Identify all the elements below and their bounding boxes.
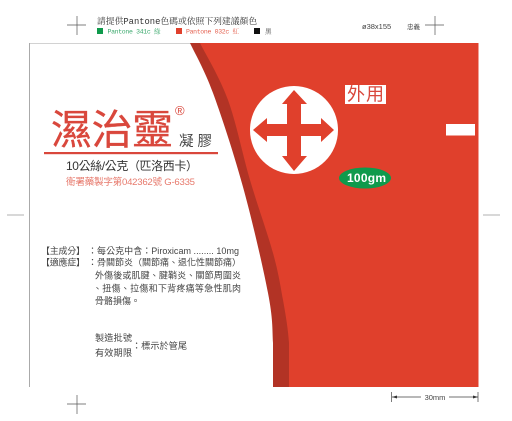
ingredient and indication text: 【適應症】 — [41, 256, 85, 268]
batch and expiry text: ：標示於管尾 — [132, 340, 187, 351]
red divider — [44, 152, 218, 154]
dosage form: 凝膠 — [179, 133, 212, 150]
colour legend: Pantone 341c 綠 — [108, 26, 161, 36]
colour legend — [97, 26, 272, 36]
ingredient and indication text: ：每公克中含：Piroxicam ........ 10mg — [88, 245, 239, 256]
approval label: 忠義 — [407, 22, 420, 31]
white tab — [446, 124, 475, 136]
ingredient and indication text: 外傷後或肌腱、腱鞘炎、關節周圍炎 — [95, 270, 241, 280]
ingredient and indication text: ：骨關節炎（關節痛、退化性關節痛） — [88, 256, 241, 268]
ingredient and indication text: 【主成分】 — [41, 245, 85, 256]
ingredient and indication text — [41, 245, 241, 306]
licence number: 衛署藥製字第042362號 G-6335 — [66, 176, 195, 188]
dark red curved band — [190, 43, 295, 387]
ingredient and indication text: 、扭傷、拉傷和下背疼痛等急性肌肉 — [93, 282, 241, 294]
tube size label: ø38x155 — [362, 22, 391, 31]
net weight badge — [339, 168, 391, 188]
dimension: 30mm: 30mm — [425, 393, 445, 402]
registered mark: ® — [175, 103, 185, 118]
icon: four-way arrows in circle — [250, 86, 338, 174]
red panel — [190, 43, 478, 387]
batch and expiry text — [95, 332, 187, 358]
net weight badge: 100gm — [347, 171, 386, 185]
main red area — [200, 43, 478, 387]
colour legend: Pantone 032c 紅 — [186, 26, 240, 36]
batch and expiry text: 有效期限 — [95, 347, 132, 358]
dimension: 30mm — [392, 392, 478, 402]
colour legend: 黑 — [265, 26, 272, 36]
strength line: 10公絲/公克（匹洛西卡） — [66, 158, 198, 173]
ingredient and indication text: 骨骼損傷。 — [95, 295, 140, 306]
print instruction header: 請提供Pantone色碼或依照下列建議顏色 — [97, 15, 257, 27]
product name: 濕治靈 — [51, 107, 173, 153]
package outline — [30, 43, 200, 387]
batch and expiry text: 製造批號 — [95, 332, 132, 343]
external use badge: 外用 — [347, 84, 384, 104]
